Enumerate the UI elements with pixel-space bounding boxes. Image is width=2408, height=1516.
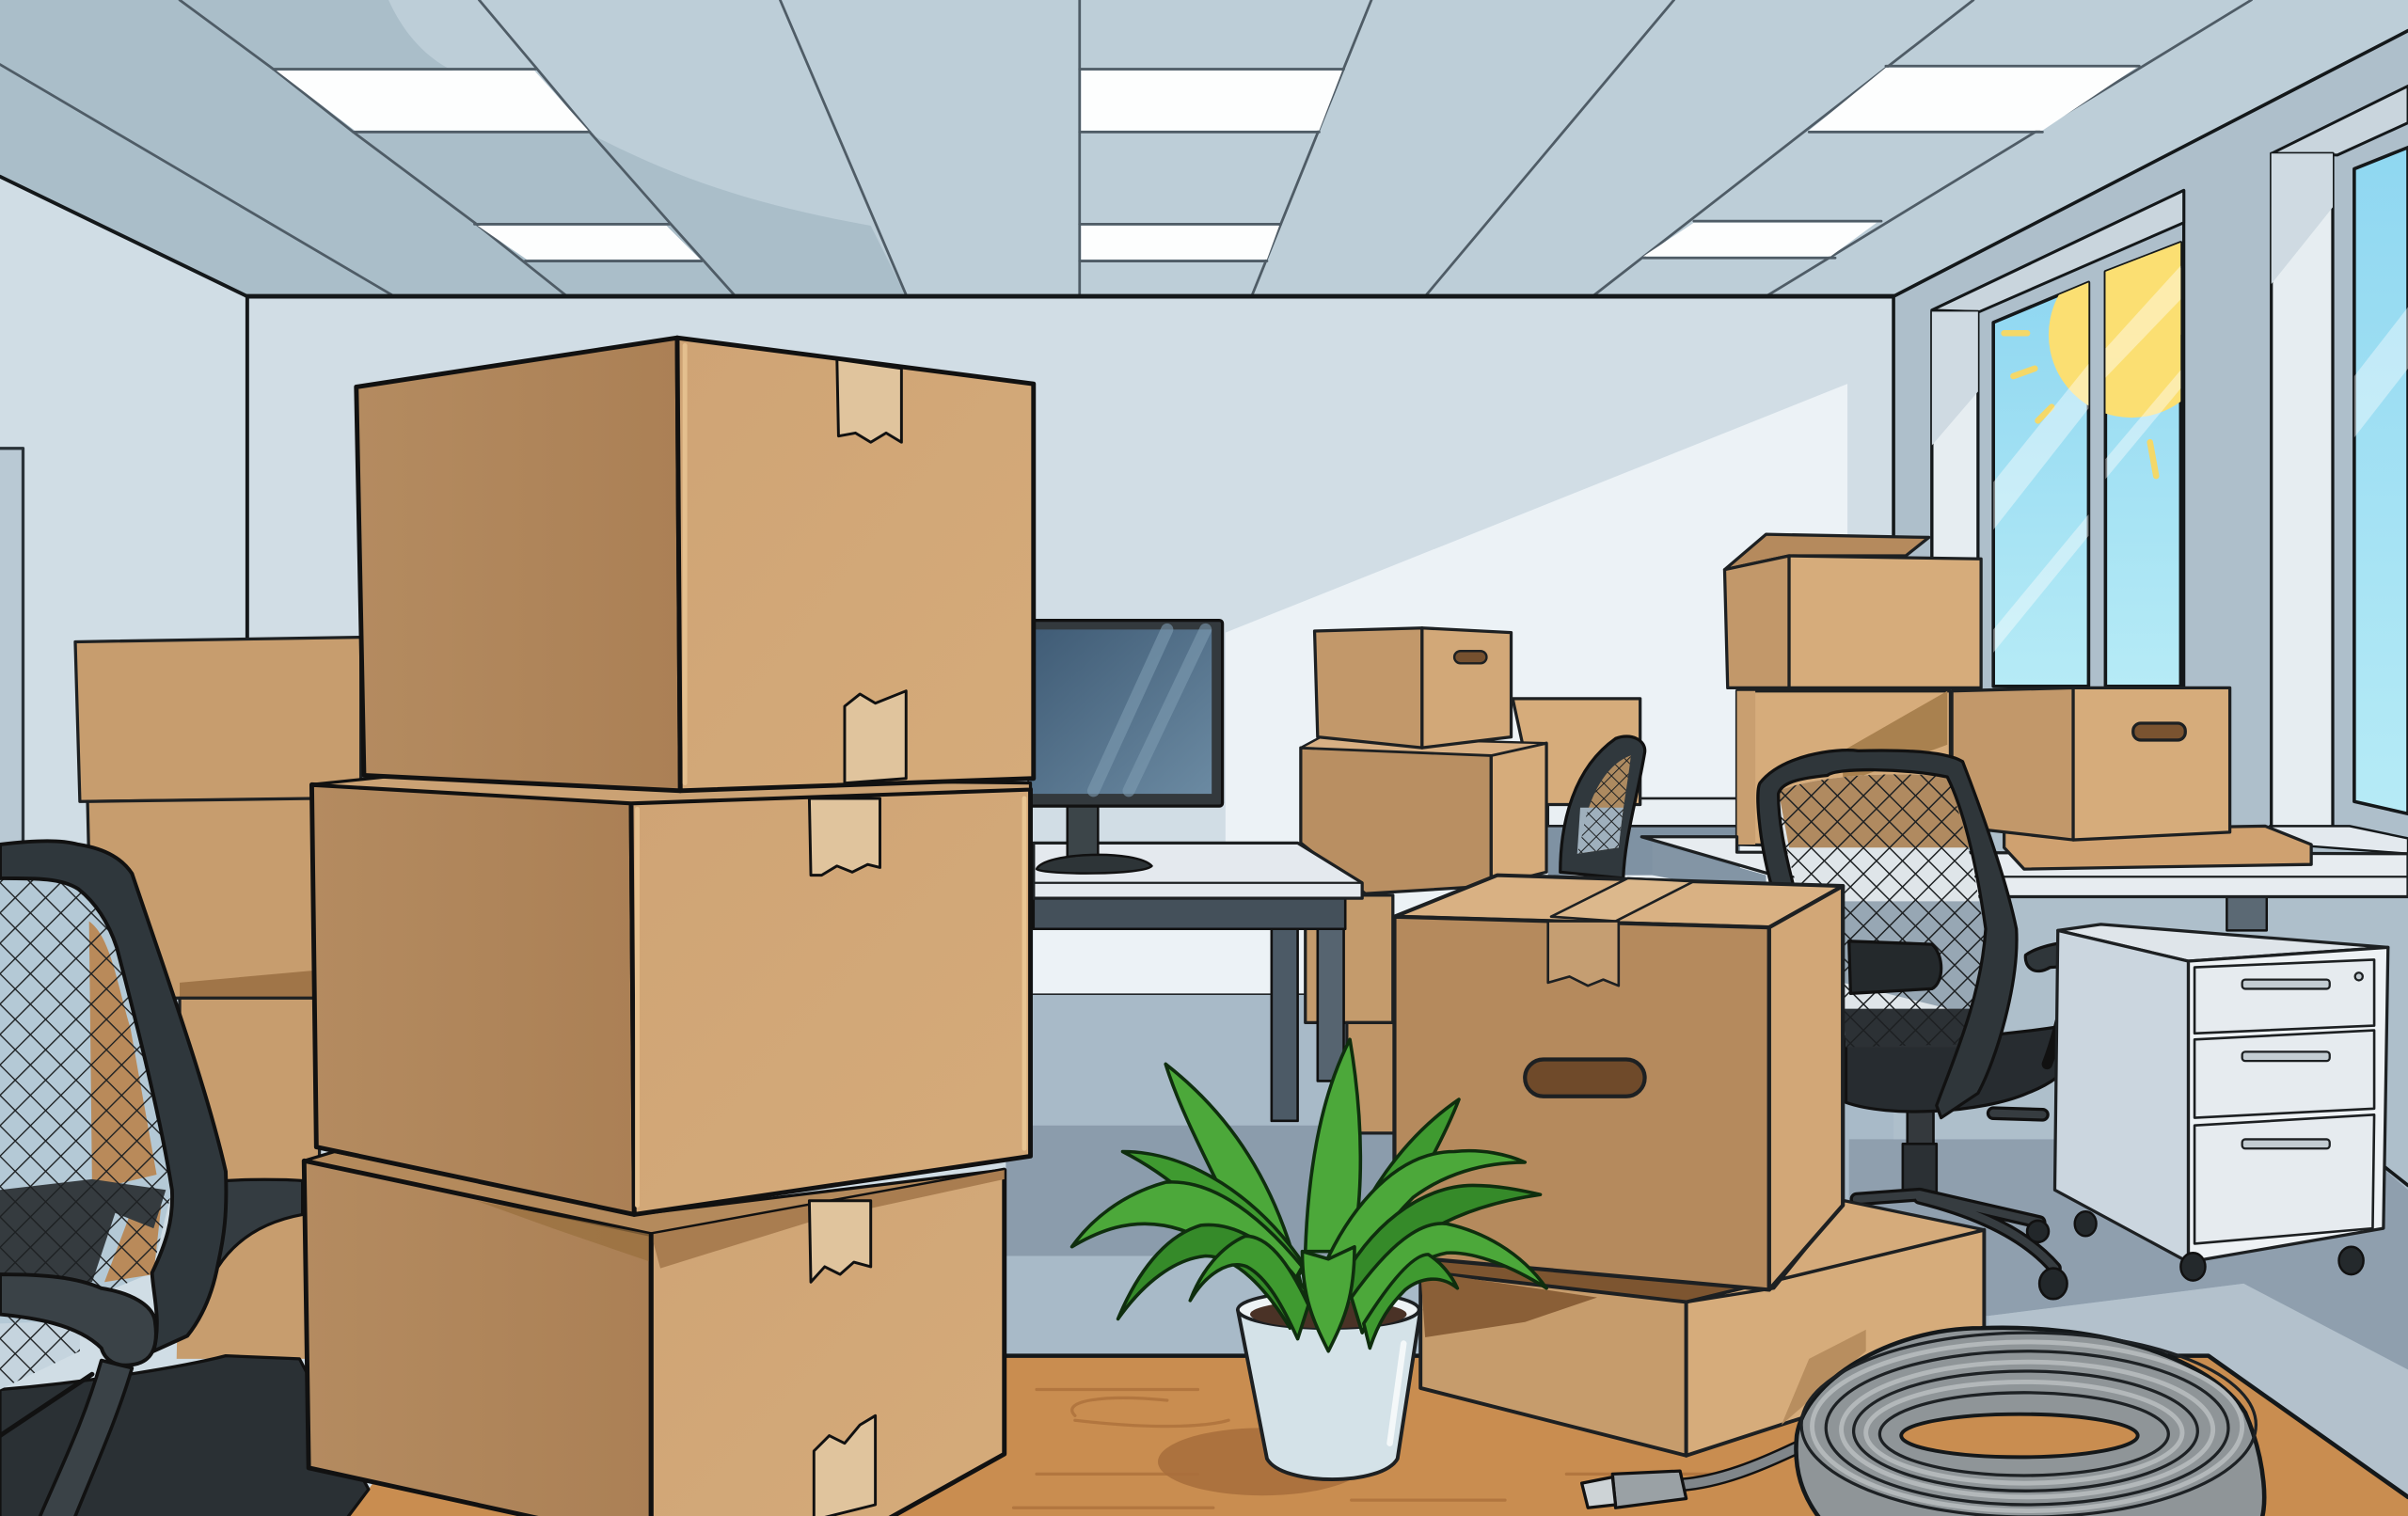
usb plug and lead [1582,1446,1799,1508]
main stack middle box [311,775,1031,1214]
office chair right [1758,750,2104,1299]
pot [1238,1291,1420,1479]
main box [1394,876,1843,1289]
desk left [1034,843,1362,1121]
drawer handles [2242,972,2363,1148]
sun [2001,243,2180,480]
box behind small stack [1513,699,1640,805]
tape [809,1201,876,1516]
tape [1548,878,1694,986]
wheels [2075,1211,2364,1281]
small top box [1315,628,1512,748]
tape [837,359,906,783]
window left [1930,188,2186,688]
ceiling lights [277,68,2136,260]
open box top right [1724,534,1981,687]
tape [809,798,880,876]
wooden board [2004,826,2311,869]
monitor [1029,621,1223,874]
seat [0,1356,369,1516]
desk top foreground [345,1356,2408,1516]
drawers [2194,959,2374,1243]
left wall [0,177,247,860]
mesh [0,878,172,1390]
desk right [1641,837,2408,930]
mesh back [1779,774,1986,1047]
box right lower [1737,691,1950,849]
boxes behind left [75,638,361,1359]
frame [0,841,226,1351]
back wall with sunlight [247,296,1896,1003]
armrest front [0,1274,156,1516]
glass reflections [1993,265,2180,653]
floor [1006,995,2408,1516]
plant [1072,1039,1546,1479]
flat box under main box [1405,1201,1984,1456]
chair base [1857,1109,2067,1299]
cable coil [1582,1328,2264,1516]
main stack top box [356,338,1034,791]
armrests [1849,941,1941,993]
wood grain [1014,1390,1728,1508]
left chair [0,841,369,1516]
right wall [1893,31,2408,1185]
box stack centre [1301,628,1546,1133]
box with handle right [1952,687,2230,840]
middle box [1301,737,1546,893]
main stack bottom box [304,1151,1005,1516]
window right [2270,86,2408,854]
leaves [1072,1039,1546,1351]
armrest left [218,1179,303,1267]
ceiling [0,0,2408,296]
frame [1758,750,2017,1118]
back counter [1548,798,1740,876]
small chair [1560,736,1645,878]
handle [1525,1060,1645,1097]
lower box column [1306,895,1401,1133]
filing cabinet [2054,924,2388,1281]
seat [1846,1026,2075,1112]
